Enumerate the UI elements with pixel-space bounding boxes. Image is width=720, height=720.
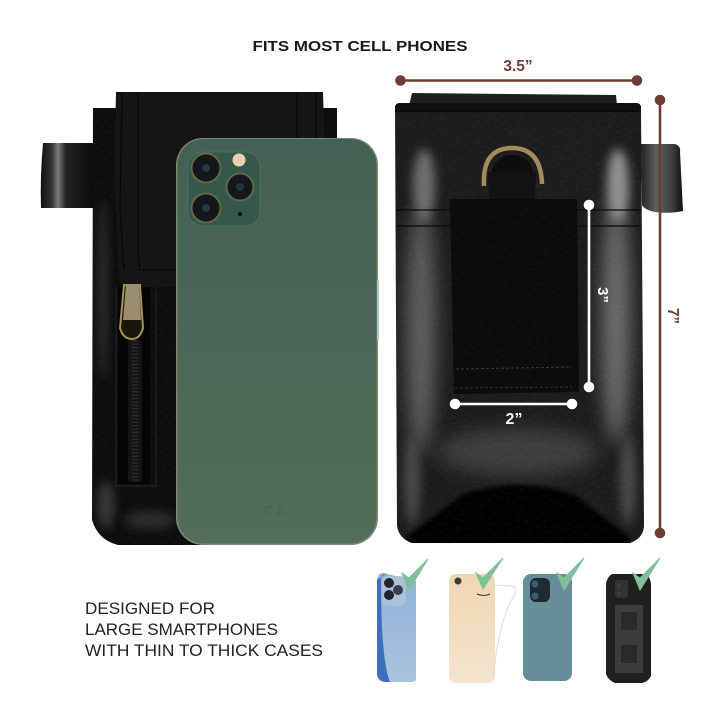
pouch body front xyxy=(88,105,343,550)
dimension: 7 inch height: 7” xyxy=(664,308,681,324)
top flap edge xyxy=(409,93,617,106)
pouch back view xyxy=(393,93,683,548)
description text: DESIGNED FOR xyxy=(85,600,215,618)
D-ring xyxy=(484,148,542,186)
zipper track xyxy=(118,287,150,484)
back body xyxy=(393,101,645,545)
description text: LARGE SMARTPHONES xyxy=(85,621,278,639)
pouch front view xyxy=(41,92,343,550)
card pocket panel xyxy=(450,199,579,394)
D-ring shadow xyxy=(490,155,535,199)
dimension: 3.5 inch width xyxy=(395,58,642,86)
description text xyxy=(85,600,323,660)
dimension: 3 inch height xyxy=(584,200,611,392)
check mark xyxy=(633,558,660,590)
compatible phone: teal case xyxy=(523,574,572,681)
phone logo marks: CE xyxy=(264,503,288,518)
D-ring strap xyxy=(488,172,536,199)
front flap xyxy=(114,92,326,287)
compatible phone: clear case xyxy=(449,574,516,683)
dimension: 7 inch height xyxy=(655,95,681,538)
compatible phone: bare blue xyxy=(377,573,416,682)
smartphone back xyxy=(176,138,379,545)
leather highlights xyxy=(406,205,436,455)
zipper pull xyxy=(120,284,143,339)
belt loop right xyxy=(641,144,683,213)
bottom fold xyxy=(405,485,630,548)
belt loop left xyxy=(41,143,95,208)
check mark xyxy=(402,559,428,590)
dimension: 3 inch height: 3” xyxy=(594,287,611,303)
description text: WITH THIN TO THICK CASES xyxy=(85,642,323,660)
check mark xyxy=(476,558,503,589)
title: FITS MOST CELL PHONES xyxy=(252,38,468,55)
camera module xyxy=(188,152,260,226)
check mark xyxy=(557,558,584,590)
dimension: 3.5 inch width: 3.5” xyxy=(503,58,533,75)
dimension: 2 inch width: 2” xyxy=(506,411,522,428)
compatible phone: rugged case xyxy=(606,574,651,683)
dimension: 2 inch width xyxy=(450,399,577,428)
